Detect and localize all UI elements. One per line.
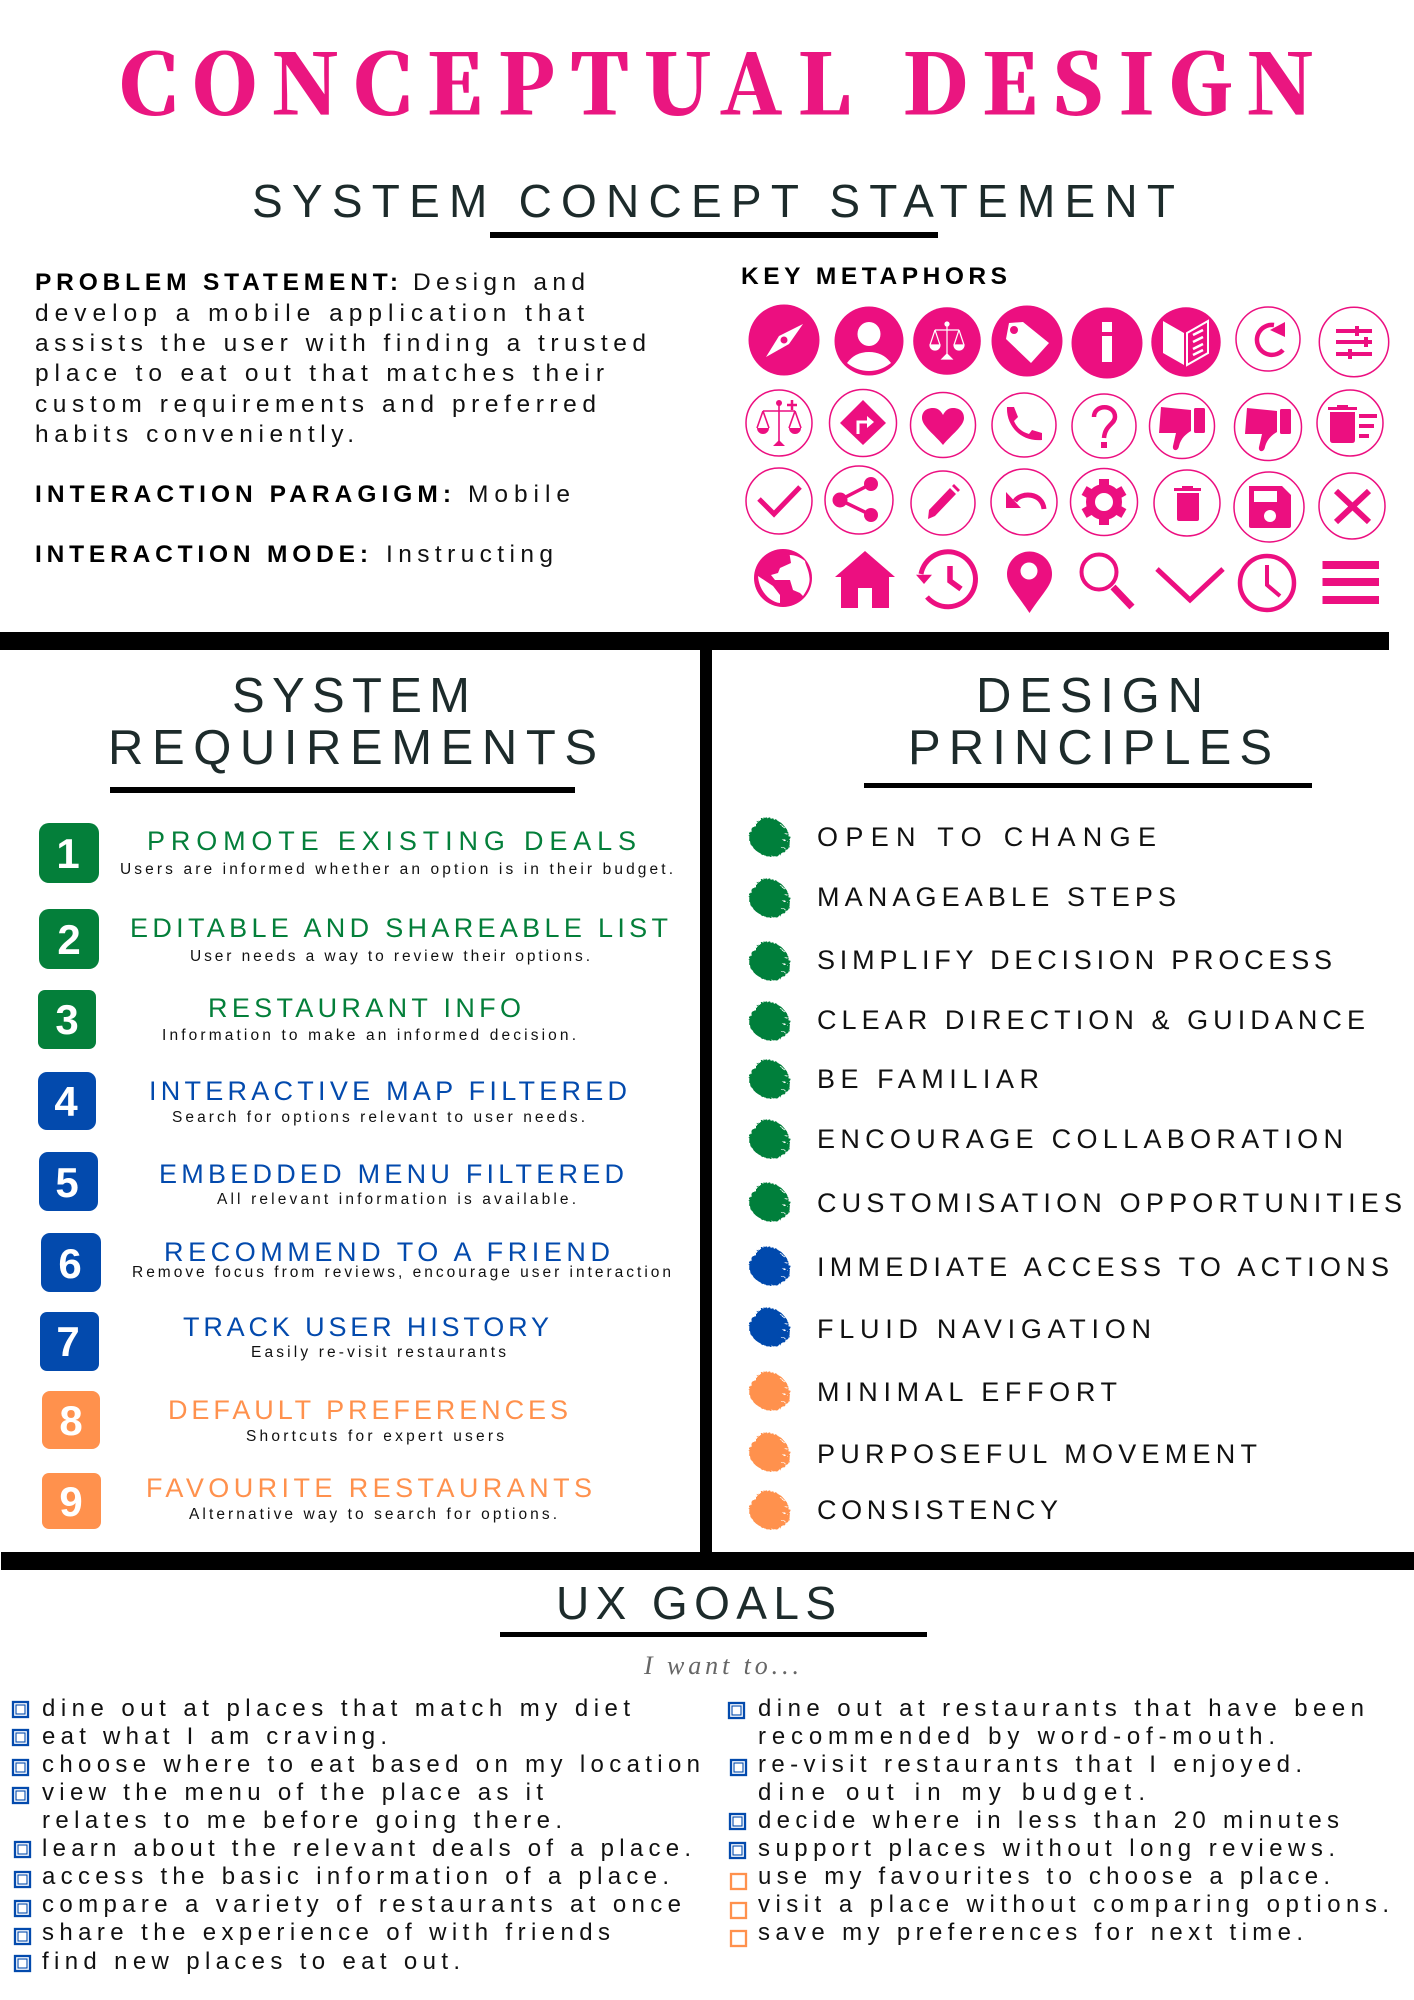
goal: learn about the relevant deals of a place. [42, 1835, 691, 1862]
divider: horizontal bar top [0, 632, 1389, 650]
text block: problem statement: develop a mobile application that [35, 300, 584, 327]
requirement 9: 9 [59, 1478, 83, 1525]
goal: relates to me before going there. [42, 1807, 562, 1834]
goal: compare a variety of restaurants at once [42, 1891, 681, 1918]
principle: CUSTOMISATION OPPORTUNITIES [817, 1188, 1402, 1218]
panel: ux goals left column [13, 1695, 700, 1975]
icon: scales with plus [746, 390, 812, 456]
principle: CLEAR DIRECTION & GUIDANCE [817, 1005, 1365, 1035]
goal: dine out at places that match my diet [42, 1695, 630, 1722]
goal: dine out in my budget. [758, 1779, 1145, 1806]
principle: MANAGEABLE STEPS [817, 882, 1176, 912]
icon: check [746, 468, 812, 534]
requirement 4: Search for options relevant to user needs. [172, 1109, 585, 1126]
icon: trash [1154, 470, 1220, 536]
heading: design principles: DESIGN [976, 669, 1203, 723]
requirement 1 [39, 823, 673, 883]
goal [731, 1751, 1302, 1806]
subheading: I want to: I want to... [643, 1651, 799, 1680]
icon: home [835, 551, 895, 608]
icon: chevron down [1157, 569, 1223, 600]
icon: thumbs down [1234, 394, 1302, 460]
text block: problem statement [35, 269, 646, 448]
requirement 3 [38, 990, 576, 1049]
icon: price tag [992, 306, 1062, 376]
icon: road turn sign [830, 390, 896, 456]
principle [749, 1247, 1389, 1286]
goal: decide where in less than 20 minutes [758, 1807, 1339, 1834]
principle: ENCOURAGE COLLABORATION [817, 1124, 1343, 1154]
heading: system concept statement: SYSTEM CONCEPT STATEMENT [252, 175, 1175, 227]
heading: system requirements: REQUIREMENTS [108, 721, 597, 775]
requirement 4 [38, 1072, 627, 1130]
text block: interaction mode: Instructing [386, 541, 553, 568]
text block: interaction paradigm: INTERACTION PARAGIGM: [35, 481, 451, 508]
principle [749, 942, 1332, 981]
requirement 5: EMBEDDED MENU FILTERED [159, 1159, 624, 1189]
text block: interaction mode [35, 541, 553, 568]
requirement 3: 3 [55, 996, 79, 1043]
icon: undo [991, 469, 1057, 535]
text block: problem statement: habits conveniently. [35, 421, 354, 448]
goal: recommended by word-of-mouth. [758, 1723, 1275, 1750]
requirement 8: Shortcuts for expert users [246, 1428, 504, 1445]
icon: open book [1151, 307, 1221, 377]
text block: problem statement: custom requirements and preferred [35, 391, 596, 418]
requirement 2: 2 [57, 916, 81, 963]
principle: OPEN TO CHANGE [817, 822, 1156, 852]
icon: close [1319, 473, 1385, 539]
requirement 1: 1 [56, 830, 80, 877]
icon: delete list [1317, 390, 1383, 456]
icon: map pin [1007, 552, 1052, 613]
heading: design principles: PRINCIPLES [908, 721, 1272, 775]
goal: share the experience of with friends [42, 1919, 610, 1946]
goal: visit a place without comparing options. [758, 1891, 1389, 1918]
requirement 2 [39, 909, 668, 969]
goal [729, 1695, 1364, 1750]
heading: system requirements: SYSTEM [232, 669, 470, 723]
principle: BE FAMILIAR [817, 1064, 1039, 1094]
requirement 2: EDITABLE AND SHAREABLE LIST [130, 913, 668, 943]
principle [749, 1433, 1257, 1472]
principle: SIMPLIFY DECISION PROCESS [817, 945, 1332, 975]
icon: globe [754, 549, 812, 607]
requirement 6: 6 [58, 1240, 82, 1287]
principle [749, 1002, 1365, 1041]
requirement 8 [42, 1391, 568, 1449]
requirement 3: Information to make an informed decision. [162, 1027, 576, 1044]
text block: interaction paradigm: Mobile [468, 481, 570, 508]
requirement 4: INTERACTIVE MAP FILTERED [149, 1076, 627, 1106]
goal: use my favourites to choose a place. [758, 1863, 1330, 1890]
divider: horizontal bar bottom [1, 1552, 1414, 1570]
principle [749, 1060, 1039, 1099]
requirement 1: PROMOTE EXISTING DEALS [147, 826, 636, 856]
requirement 7: TRACK USER HISTORY [183, 1312, 549, 1342]
requirement 4: 4 [54, 1078, 78, 1125]
icon: thumbs down [1150, 394, 1214, 458]
requirement 3: RESTAURANT INFO [208, 993, 521, 1023]
icon: settings gear [1070, 468, 1138, 536]
requirement 5: All relevant information is available. [217, 1191, 576, 1208]
text block: problem statement: Design and [413, 269, 585, 296]
panel: system requirements list [38, 823, 673, 1529]
principle [749, 1183, 1402, 1222]
panel: design principles list [749, 818, 1402, 1530]
principle: MINIMAL EFFORT [817, 1377, 1117, 1407]
goal: support places without long reviews. [758, 1835, 1335, 1862]
heading: ux goals [500, 1577, 927, 1637]
principle [749, 879, 1176, 918]
text block: interaction mode: INTERACTION MODE: [35, 541, 368, 568]
goal: find new places to eat out. [42, 1948, 460, 1975]
icon: compass [748, 304, 820, 376]
principle: CONSISTENCY [817, 1495, 1058, 1525]
principle: IMMEDIATE ACCESS TO ACTIONS [817, 1252, 1389, 1282]
icon: save [1234, 472, 1304, 542]
principle: PURPOSEFUL MOVEMENT [817, 1439, 1257, 1469]
icon: sliders [1319, 307, 1389, 377]
principle [749, 1491, 1058, 1530]
icon: pencil [911, 471, 975, 535]
requirement 7: Easily re-visit restaurants [251, 1344, 506, 1361]
divider: vertical bar [700, 650, 712, 1552]
requirement 9: Alternative way to search for options. [189, 1506, 557, 1523]
requirement 8: DEFAULT PREFERENCES [168, 1395, 568, 1425]
goal: save my preferences for next time. [758, 1919, 1303, 1946]
principle [749, 1308, 1151, 1347]
title: CONCEPTUAL DESIGN [119, 21, 1314, 138]
text block: problem statement: PROBLEM STATEMENT: [35, 269, 398, 296]
requirement 1: Users are informed whether an option is in their budget. [120, 861, 673, 878]
goal: view the menu of the place as it [42, 1779, 543, 1806]
goal: access the basic information of a place. [42, 1863, 669, 1890]
icon: question mark [1072, 394, 1136, 458]
icon: search [1082, 554, 1132, 607]
text block: problem statement: place to eat out that matches their [35, 360, 604, 387]
principle [749, 818, 1156, 857]
heading: ux goals: UX GOALS [556, 1577, 836, 1629]
requirement 7: 7 [56, 1318, 80, 1365]
icon: history [916, 552, 975, 607]
requirement 7 [40, 1312, 549, 1371]
icon: phone [992, 393, 1056, 457]
requirement 9: FAVOURITE RESTAURANTS [146, 1473, 592, 1503]
goal: eat what I am craving. [42, 1723, 387, 1750]
heading: design principles [864, 669, 1312, 788]
icon: heart [910, 392, 976, 458]
requirement 6: Remove focus from reviews, encourage user interaction [132, 1264, 671, 1281]
icon: share [825, 466, 893, 534]
goal [13, 1779, 562, 1834]
heading: key metaphors: KEY METAPHORS [741, 263, 1007, 290]
icon: clock [1240, 556, 1294, 610]
principle: FLUID NAVIGATION [817, 1314, 1151, 1344]
heading: system requirements [108, 669, 597, 793]
icon: refresh [1236, 307, 1300, 371]
requirement 6 [41, 1233, 671, 1292]
requirement 5: 5 [55, 1159, 79, 1206]
icon: info [1072, 308, 1142, 378]
requirement 5 [39, 1152, 624, 1211]
goal: dine out at restaurants that have been [758, 1695, 1364, 1722]
principle [749, 1372, 1117, 1411]
panel: ux goals right column [729, 1695, 1389, 1946]
requirement 9 [42, 1473, 592, 1529]
panel: key metaphor icons [746, 304, 1389, 613]
text block: problem statement: assists the user with finding a trusted [35, 330, 646, 357]
requirement 2: User needs a way to review their options. [190, 948, 590, 965]
requirement 6: RECOMMEND TO A FRIEND [164, 1237, 610, 1267]
icon: scales [913, 307, 981, 375]
requirement 8: 8 [59, 1397, 83, 1444]
icon: menu [1322, 561, 1379, 604]
goal: re-visit restaurants that I enjoyed. [758, 1751, 1302, 1778]
principle [749, 1120, 1343, 1159]
goal: choose where to eat based on my location [42, 1751, 700, 1778]
icon: user [834, 306, 904, 376]
